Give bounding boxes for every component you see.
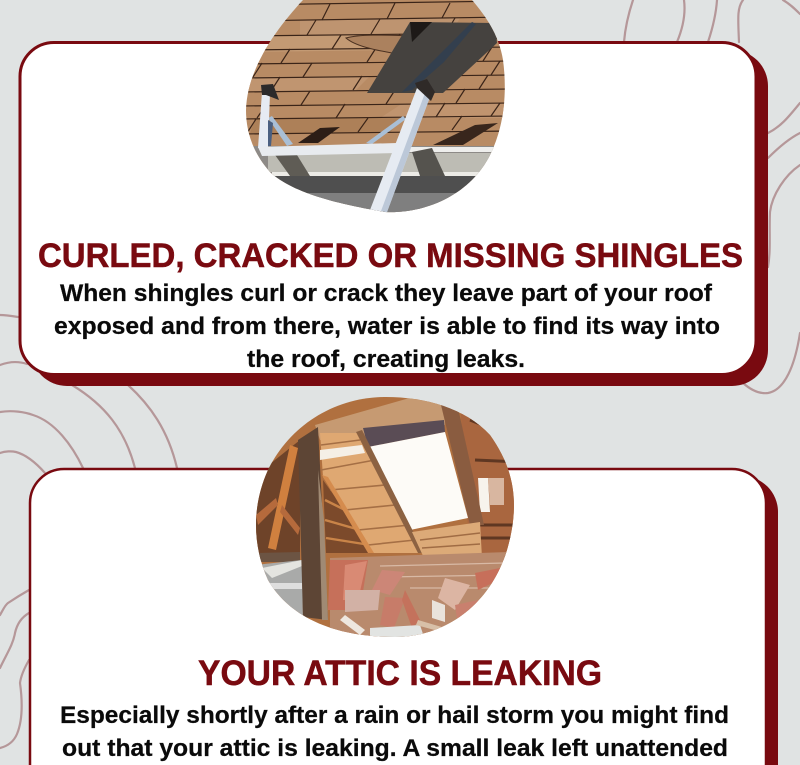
card 2 offset shadow xyxy=(60,476,778,765)
body text: shingles: the roof, creating leaks. xyxy=(247,346,525,373)
body text: attic: out that your attic is leaking. A small leak left unattended xyxy=(62,735,728,762)
left storage xyxy=(262,560,303,616)
right wall xyxy=(460,413,514,560)
ladder xyxy=(268,116,293,146)
card 1 white face xyxy=(20,42,756,374)
photo: collapsed attic with skylight opening xyxy=(250,395,520,640)
top wall xyxy=(315,395,445,440)
panel: curled, cracked or missing shingles xyxy=(20,0,768,386)
under-slope rafters xyxy=(323,480,368,553)
skylight opening xyxy=(368,432,468,530)
cast shadows xyxy=(298,127,340,143)
shingle courses xyxy=(240,1,510,134)
body text: attic xyxy=(60,702,729,762)
body text: shingles: exposed and from there, water is able to find its way into xyxy=(54,313,720,340)
fallen roof tiles xyxy=(328,560,368,610)
body text: attic: Especially shortly after a rain or hail storm you might find xyxy=(60,702,729,729)
exposed dark underlay xyxy=(367,22,497,93)
lifted shingle xyxy=(345,34,402,54)
brick wall xyxy=(330,552,515,640)
heading: curled, cracked or missing shingles: CURLED, CRACKED OR MISSING SHINGLES xyxy=(38,237,743,275)
card 2 outline xyxy=(30,469,766,765)
panel: your attic is leaking xyxy=(30,395,778,765)
heading: your attic is leaking: YOUR ATTIC IS LEAKING xyxy=(198,654,602,693)
central post xyxy=(298,427,328,620)
card 2 white face xyxy=(30,469,766,765)
photo: ladder against damaged shingle roof xyxy=(240,0,510,218)
fascia and gutter xyxy=(253,146,494,212)
body text: shingles: When shingles curl or crack they leave part of your roof xyxy=(60,280,713,307)
card 1 offset shadow xyxy=(31,50,768,386)
left rafters xyxy=(256,442,300,559)
body text: shingles xyxy=(54,280,720,373)
sloped plank ceiling xyxy=(320,433,420,553)
